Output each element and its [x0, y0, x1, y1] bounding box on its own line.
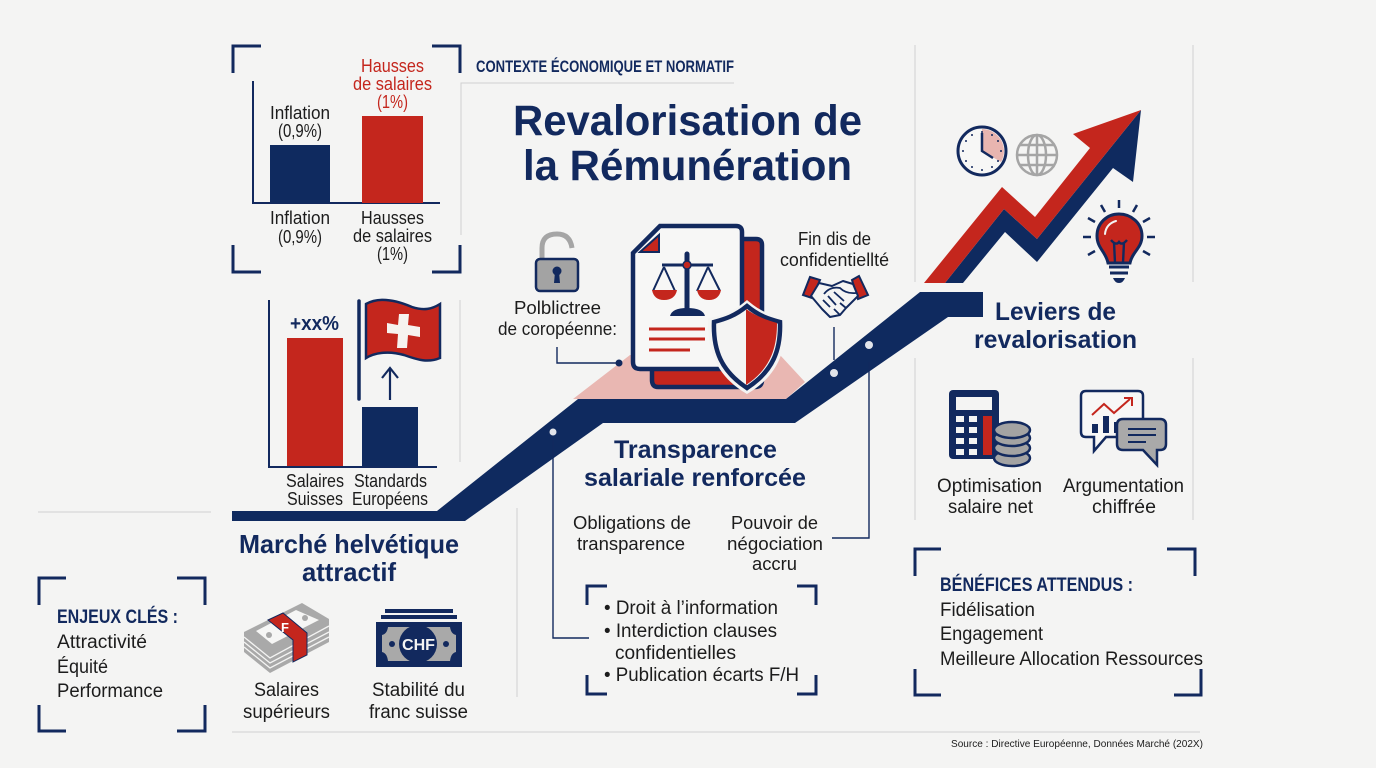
- connectors: [553, 327, 869, 638]
- label: directive: Polblictree: [514, 298, 601, 318]
- bar labels above: de salaires: [353, 74, 432, 94]
- icon: rising arrow: [924, 110, 1141, 283]
- panel: key issues: [39, 578, 205, 731]
- icon: handshake: [803, 276, 868, 317]
- panel: key issues: Performance: [57, 681, 163, 702]
- panel: rights list: [587, 586, 816, 694]
- icon: chart and speech bubbles: [1081, 391, 1166, 465]
- heading: reinforced salary transparency: salariale renforcée: [584, 464, 806, 492]
- panel: rights list: • Interdiction clauses: [604, 621, 777, 642]
- label: franc stability: Stabilité du: [372, 680, 465, 701]
- label: end of confidentiality: confidentiellté: [780, 250, 889, 270]
- label: net salary optimisation: salaire net: [948, 497, 1034, 518]
- label: higher salaries: [243, 680, 330, 723]
- heading: levers: revalorisation: [974, 326, 1137, 354]
- title: Revalorisation de: [513, 97, 862, 145]
- heading: levers: Leviers de: [995, 298, 1116, 326]
- icon: shield: [708, 300, 786, 394]
- label: negotiating power: accru: [752, 553, 797, 574]
- label: quantified argument: chiffrée: [1092, 497, 1156, 518]
- panel: expected benefits: [915, 549, 1203, 695]
- heading: levers: [974, 298, 1137, 354]
- rising navy band: [232, 292, 983, 521]
- panel: key issues: Équité: [57, 657, 108, 678]
- panel: rights list: confidentielles: [615, 643, 736, 664]
- label: directive: [498, 298, 617, 339]
- label: directive: de coropéenne:: [498, 319, 617, 339]
- label: net salary optimisation: [937, 476, 1042, 518]
- icon: Swiss flag: [366, 300, 440, 361]
- label: higher salaries: supérieurs: [243, 702, 330, 723]
- bar labels below: (1%): [377, 244, 408, 264]
- pink platform glow: [573, 355, 805, 399]
- label: end of confidentiality: [780, 229, 889, 270]
- flag pole: [357, 301, 361, 399]
- icon: clock: [958, 127, 1006, 175]
- label: franc stability: [369, 680, 468, 723]
- axis labels: [286, 471, 428, 509]
- label: franc stability: franc suisse: [369, 702, 468, 723]
- heading: attractive Swiss market: [239, 529, 459, 587]
- label: higher salaries: Salaires: [254, 680, 319, 701]
- label: negotiating power: [727, 512, 823, 574]
- icon: CHF banknote: [376, 609, 462, 667]
- back page: [652, 239, 762, 387]
- label: end of confidentiality: Fin dis de: [798, 229, 871, 249]
- document with scales and shield: [633, 226, 786, 394]
- source: Source : Directive Européenne, Données Marché (202X): [951, 739, 1203, 750]
- icon: globe: [1017, 135, 1057, 175]
- bar labels above: (1%): [377, 92, 408, 112]
- label: transparency obligations: Obligations de: [573, 512, 691, 533]
- icon: banknote stack: [244, 603, 329, 673]
- bar: inflation: [270, 145, 330, 203]
- panel: key issues: ENJEUX CLÉS :: [57, 606, 178, 628]
- label: quantified argument: Argumentation: [1063, 476, 1184, 497]
- text lines on document: [649, 329, 705, 350]
- panel: rights list: • Publication écarts F/H: [604, 665, 799, 686]
- axis labels: Standards: [354, 471, 427, 491]
- bar: Swiss salaries: [287, 338, 343, 466]
- bar labels below: Inflation: [270, 208, 330, 228]
- panel: expected benefits: Meilleure Allocation Ressources: [940, 649, 1203, 670]
- bar labels below: de salaires: [353, 226, 432, 246]
- panel: expected benefits: Engagement: [940, 624, 1044, 645]
- heading: attractive Swiss market: Marché helvétique: [239, 529, 459, 559]
- axis labels: Salaires: [286, 471, 344, 491]
- bar labels below: [270, 208, 432, 264]
- panel: key issues: Attractivité: [57, 632, 147, 653]
- label: transparency obligations: transparence: [577, 533, 685, 554]
- icon: calculator and coins: [949, 390, 1030, 466]
- bar labels above: Hausses: [361, 56, 424, 76]
- icon: banknote stack: F: [281, 620, 289, 635]
- section label: context: CONTEXTE ÉCONOMIQUE ET NORMATIF: [476, 57, 734, 76]
- label: negotiating power: Pouvoir de: [731, 512, 818, 533]
- panel: expected benefits: BÉNÉFICES ATTENDUS :: [940, 574, 1133, 596]
- bar labels above: [270, 56, 432, 141]
- heading: attractive Swiss market: attractif: [302, 557, 396, 587]
- value label: +xx%: [290, 313, 339, 335]
- icon: scales of justice: [652, 254, 721, 316]
- bar: salary increases: [362, 116, 423, 203]
- bar labels below: (0,9%): [278, 227, 322, 247]
- front page: [633, 226, 742, 369]
- icon: open padlock: [536, 234, 578, 291]
- icon: CHF banknote: CHF: [402, 637, 435, 654]
- icon: light bulb: [1083, 200, 1155, 283]
- panel: rights list: • Droit à l’information: [604, 598, 778, 619]
- label: quantified argument: [1063, 476, 1184, 518]
- label: negotiating power: négociation: [727, 533, 823, 554]
- bar: European standards: [362, 407, 418, 466]
- panel: inflation vs salary chart: [233, 46, 460, 272]
- bar labels below: Hausses: [361, 208, 424, 228]
- band dots: [550, 341, 873, 436]
- axis labels: Européens: [352, 489, 428, 509]
- label: transparency obligations: [573, 512, 691, 554]
- label: net salary optimisation: Optimisation: [937, 476, 1042, 497]
- heading: reinforced salary transparency: [584, 436, 806, 492]
- panel: Swiss vs European salaries chart: [269, 300, 440, 509]
- panel: expected benefits: Fidélisation: [940, 600, 1035, 621]
- axis labels: Suisses: [287, 489, 343, 509]
- bar labels above: Inflation: [270, 103, 330, 123]
- arrow: up: [382, 368, 398, 400]
- heading: reinforced salary transparency: Transparence: [614, 436, 777, 464]
- bar labels above: (0,9%): [278, 121, 322, 141]
- title: [513, 97, 862, 190]
- title: la Rémunération: [523, 142, 852, 190]
